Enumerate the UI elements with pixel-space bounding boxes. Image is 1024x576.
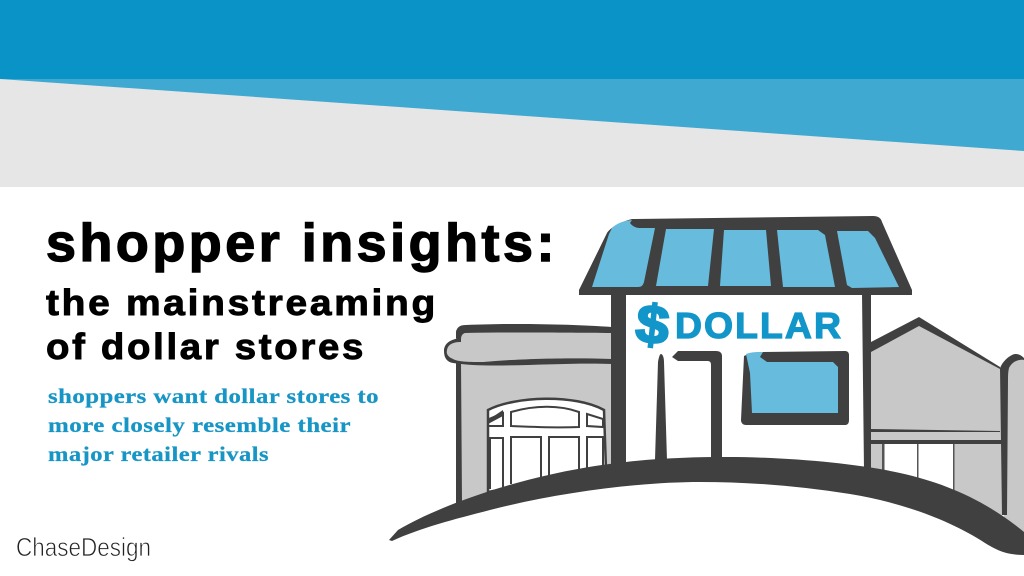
title: shopper insights: [46,214,558,273]
store sign: $ [633,293,672,357]
description text: more closely resemble their [48,413,351,437]
center store [579,216,912,470]
subtitle heading [46,282,438,367]
illustration: storefront street [389,216,1024,555]
far right pillar [1004,359,1024,540]
logo: ChaseDesign: ChaseDesign [16,532,151,562]
hill [389,457,1024,555]
awning [579,216,912,295]
description text: shoppers want dollar stores to [48,384,379,408]
description text: major retailer rivals [48,442,269,466]
description text [48,384,379,466]
shop window [741,351,849,425]
arched window [488,399,606,492]
subtitle heading: of dollar stores [46,326,366,367]
right building [870,317,1024,540]
door [655,351,722,460]
store sign: DOLLAR [675,305,843,346]
left building [444,324,612,505]
store sign [633,293,843,357]
subtitle heading: the mainstreaming [46,282,438,323]
header band [0,0,1024,187]
